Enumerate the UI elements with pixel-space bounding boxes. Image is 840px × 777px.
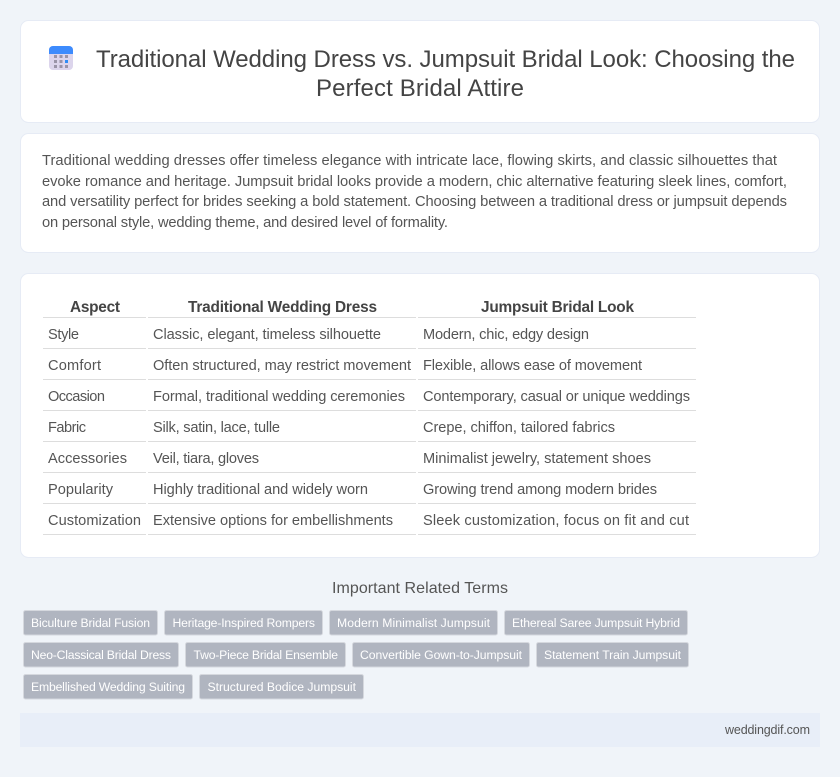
tag: Two-Piece Bridal Ensemble — [194, 648, 338, 662]
table row: style: Style — [48, 327, 79, 343]
table row: fabric: Silk, satin, lace, tulle — [153, 420, 280, 436]
tag: Convertible Gown-to-Jumpsuit — [360, 648, 523, 662]
tag — [164, 610, 322, 635]
table row: popularity: Growing trend among modern brides — [423, 482, 657, 498]
table row: accessories — [48, 451, 651, 467]
tag — [352, 642, 530, 667]
title: Perfect Bridal Attire — [316, 75, 524, 102]
table row: customization: Sleek customization, focus on fit and cut — [423, 513, 689, 529]
tag — [536, 642, 688, 667]
table header: Jumpsuit Bridal Look — [481, 299, 634, 316]
text block: introduction: on personal style, wedding theme, and desired level of formality. — [42, 215, 448, 231]
table row: customization — [48, 513, 689, 529]
table row: accessories: Veil, tiara, gloves — [153, 451, 259, 467]
table header — [70, 299, 634, 316]
tag: Modern Minimalist Jumpsuit — [337, 616, 491, 630]
tag — [24, 610, 158, 635]
table row: occasion: Occasion — [48, 389, 105, 405]
tag — [24, 674, 192, 699]
table row: style: Modern, chic, edgy design — [423, 327, 589, 343]
text block: introduction: evoke romance and heritage. Jumpsuit bridal looks provide a modern, chic alternative featuring sleek lines, comfort, — [42, 174, 787, 190]
table row: comfort: Comfort — [48, 358, 101, 374]
table row: fabric — [48, 420, 615, 436]
tag: Ethereal Saree Jumpsuit Hybrid — [512, 616, 680, 630]
heading: related terms: Important Related Terms — [332, 580, 508, 597]
tag — [200, 674, 364, 699]
tag: Statement Train Jumpsuit — [544, 648, 682, 662]
tag — [330, 610, 498, 635]
text block: introduction: Traditional wedding dresses offer timeless elegance with intricate lace, flowing skirts, and classic silhouettes that — [42, 153, 777, 169]
table row: comfort — [48, 358, 642, 374]
table row: comfort: Flexible, allows ease of movement — [423, 358, 642, 374]
panel: title header — [20, 20, 820, 122]
table row: occasion: Contemporary, casual or unique weddings — [423, 389, 690, 405]
table header: Traditional Wedding Dress — [188, 299, 377, 316]
tag — [186, 642, 346, 667]
table row: popularity: Popularity — [48, 482, 114, 498]
tag: Embellished Wedding Suiting — [31, 680, 185, 694]
tag — [504, 610, 688, 635]
tag: Heritage-Inspired Rompers — [172, 616, 315, 630]
tag — [24, 642, 178, 667]
table row: style: Classic, elegant, timeless silhouette — [153, 327, 381, 343]
footer — [20, 713, 820, 747]
table row: customization: Extensive options for embellishments — [153, 513, 393, 529]
table row: comfort: Often structured, may restrict movement — [153, 358, 411, 374]
tag list: related terms — [24, 610, 688, 699]
panel: comparison table — [20, 274, 820, 558]
table row: customization: Customization — [48, 513, 141, 529]
table header: Aspect — [70, 299, 120, 316]
text block: introduction: and versatility perfect for brides seeking a bold statement. Choosing between a traditional dress or jumpsuit depends — [42, 194, 787, 210]
table row: accessories: Minimalist jewelry, statement shoes — [423, 451, 651, 467]
table row: popularity: Highly traditional and widely worn — [153, 482, 368, 498]
tag: Structured Bodice Jumpsuit — [208, 680, 357, 694]
tag: Biculture Bridal Fusion — [31, 616, 150, 630]
table row: fabric: Fabric — [48, 420, 86, 436]
table row: occasion: Formal, traditional wedding ceremonies — [153, 389, 405, 405]
table row: popularity — [48, 482, 657, 498]
icon: calendar — [49, 46, 73, 70]
table row: accessories: Accessories — [48, 451, 127, 467]
title: Traditional Wedding Dress vs. Jumpsuit Bridal Look: Choosing the — [96, 46, 795, 73]
table row: fabric: Crepe, chiffon, tailored fabrics — [423, 420, 615, 436]
tag: Neo-Classical Bridal Dress — [31, 648, 171, 662]
table row: style — [48, 327, 589, 343]
footer: weddingdif.com — [724, 723, 810, 737]
table row: occasion — [48, 389, 690, 405]
panel: introduction — [20, 134, 820, 252]
